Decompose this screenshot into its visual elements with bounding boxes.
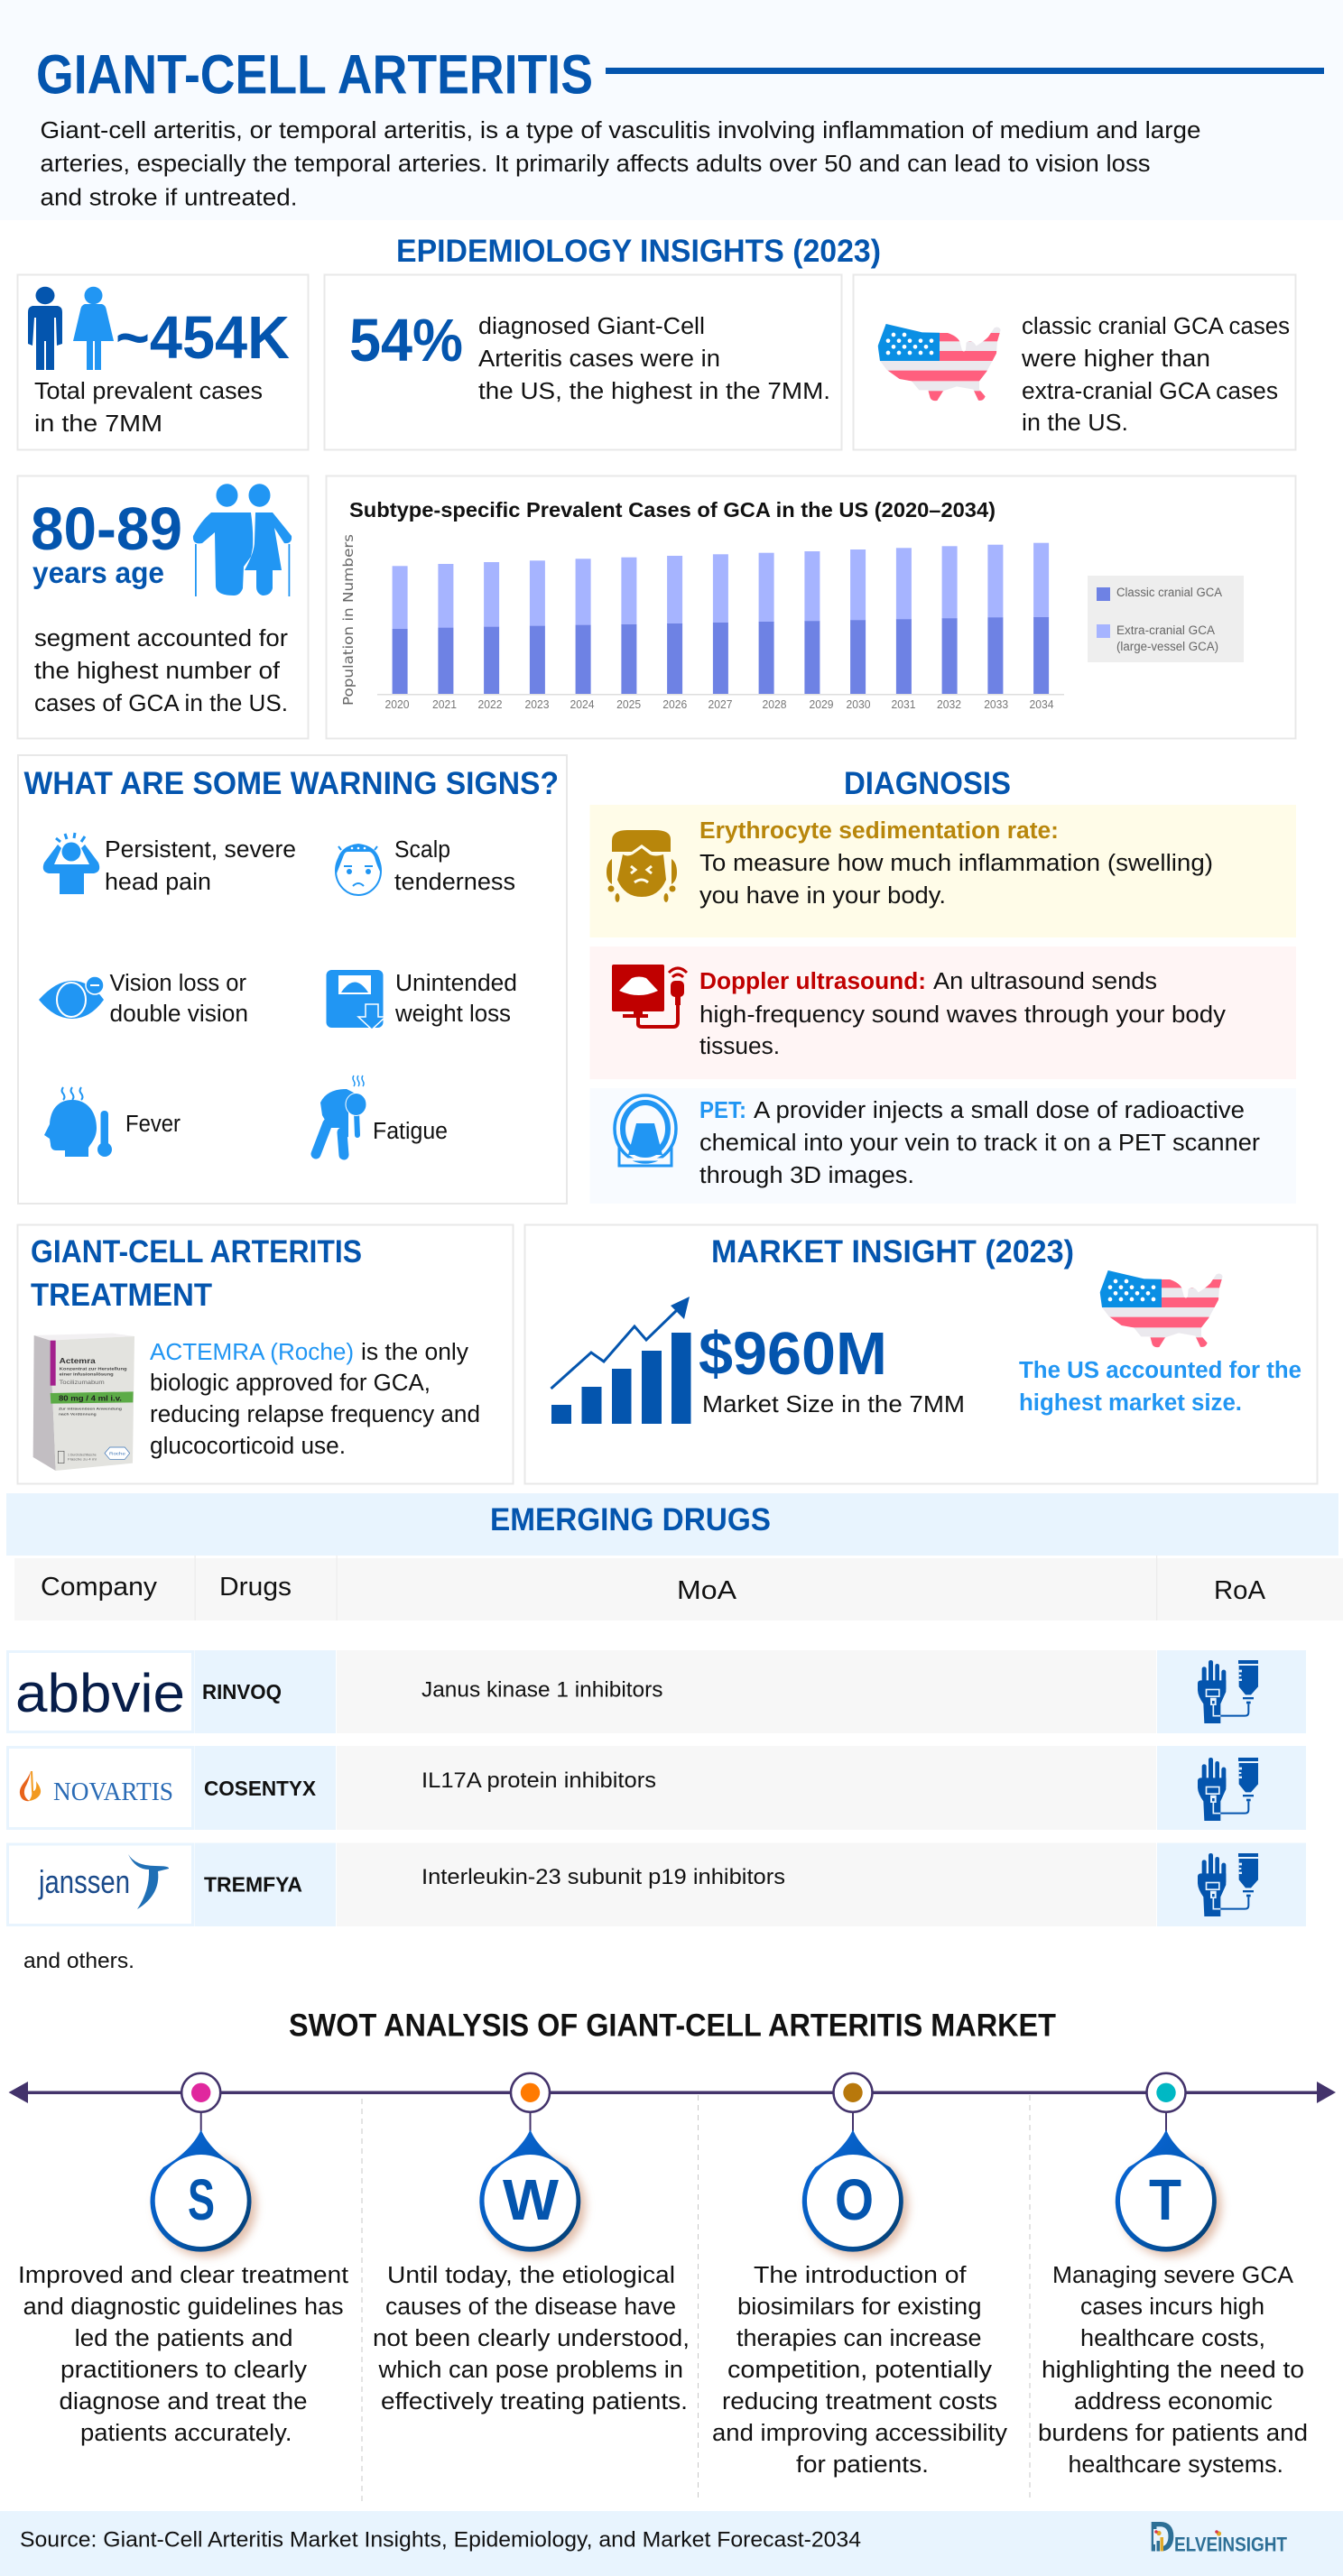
heading: GIANT-CELL ARTERITIS [31, 1234, 362, 1270]
sign: fatigue: Fatigue [373, 1119, 448, 1144]
MoA: Interleukin-23 subunit p19 inhibitors [421, 1865, 785, 1889]
text: To measure how much inflammation (swelling) [699, 851, 1213, 876]
description: glucocorticoid use. [150, 1434, 346, 1459]
sign: fever: Fever [125, 1112, 181, 1137]
sign: scalp tenderness [336, 837, 515, 895]
text: Doppler ultrasound: [699, 969, 926, 994]
product box: Actemra: Tocilizumabum [60, 1380, 105, 1386]
sign: scalp tenderness: Scalp [394, 837, 450, 863]
legend: Classic cranial GCA [1116, 586, 1222, 599]
icon: ultrasound machine [612, 965, 687, 1027]
year labels: 2029 [809, 698, 834, 711]
sign: weight loss: Unintended [395, 971, 517, 996]
SWOT: weakness: effectively treating patients. [381, 2389, 688, 2414]
description: cases of GCA in the US. [34, 691, 288, 716]
description [34, 626, 289, 716]
product box: Actemra: Konzentrat zur Herstellung [60, 1366, 127, 1371]
heading: diagnosis: DIAGNOSIS [844, 766, 1011, 801]
header panel [0, 0, 1343, 220]
description [1021, 314, 1290, 436]
product box: Actemra: Roche [109, 1452, 125, 1457]
intro paragraph [40, 118, 1200, 211]
description: were higher than [1021, 346, 1210, 372]
text: through 3D images. [699, 1163, 914, 1188]
intro paragraph: and stroke if untreated. [40, 186, 298, 211]
year labels: 2032 [937, 698, 961, 711]
heading: SWOT: SWOT ANALYSIS OF GIANT-CELL ARTERITIS MARKET [289, 2008, 1056, 2043]
stat: 960M: $960M [699, 1320, 887, 1388]
description: extra-cranial GCA cases [1022, 379, 1278, 404]
description: ACTEMRA (Roche) [150, 1340, 354, 1365]
SWOT: weakness: causes of the disease have [385, 2294, 676, 2320]
panel: erythrocyte sedimentation rate [590, 805, 1296, 937]
year labels: 2034 [1029, 698, 1054, 711]
year labels: 2033 [984, 698, 1008, 711]
icon: fever head [44, 1087, 112, 1157]
description: reducing relapse frequency and [150, 1402, 480, 1427]
description: in the US. [1022, 411, 1128, 436]
SWOT: weakness: W [503, 2167, 560, 2232]
heading: TREATMENT [31, 1278, 212, 1313]
SWOT: weakness: not been clearly understood, [373, 2326, 690, 2351]
product box: Actemra: einer Infusionslösung [60, 1371, 114, 1376]
product box: Actemra: Actemra [60, 1356, 96, 1365]
SWOT: strength: diagnose and treat the [60, 2389, 307, 2414]
y-axis label: Population in Numbers [340, 534, 357, 706]
panel: total prevalent cases [18, 274, 309, 449]
description: biologic approved for GCA, [150, 1371, 431, 1396]
product box: Actemra: nach Verdünnung [59, 1411, 97, 1416]
text: PET: [699, 1098, 746, 1123]
table header: Drugs [219, 1573, 292, 1602]
year labels: 2020 [384, 698, 410, 711]
product box: Actemra: 1 Durchstechflasche [68, 1453, 97, 1456]
year labels: 2031 [892, 698, 916, 711]
stat: 454K: ~454K [116, 304, 290, 372]
logo: novartis: NOVARTIS [53, 1777, 173, 1806]
SWOT: strength: and diagnostic guidelines has [23, 2294, 344, 2320]
icon: elderly couple [193, 484, 292, 596]
MoA: IL17A protein inhibitors [421, 1768, 656, 1793]
sign: vision loss [39, 971, 248, 1027]
panel: doppler ultrasound [590, 946, 1296, 1079]
icon: scale [327, 970, 385, 1029]
text [699, 818, 1213, 909]
description: segment accounted for [34, 626, 289, 651]
sign: fever [44, 1087, 181, 1157]
panel: treatment [18, 1225, 513, 1483]
sign: vision loss: double vision [110, 1002, 248, 1027]
footer [0, 2511, 1343, 2576]
years age: years age [32, 556, 164, 589]
SWOT: strength: patients accurately. [80, 2421, 292, 2446]
SWOT: strength [18, 2129, 348, 2446]
sign: fatigue [316, 1076, 448, 1155]
SWOT: strength: Improved and clear treatment [18, 2263, 348, 2288]
stat: 54%: 54% [349, 307, 463, 374]
callout: The US accounted for the [1019, 1358, 1301, 1383]
stat: 80-89: 80-89 [31, 495, 182, 563]
panel: market insight [525, 1225, 1318, 1483]
SWOT: opportunity: biosimilars for existing [737, 2294, 982, 2320]
logo: novartis [20, 1771, 173, 1806]
drug name: COSENTYX [204, 1777, 317, 1800]
icon: head pain [43, 833, 99, 894]
intro paragraph: arteries, especially the temporal arteries. It primarily affects adults over 50 and can lead to vision loss [40, 152, 1151, 177]
title: GIANT-CELL ARTERITIS [36, 43, 593, 105]
icon: PET scanner [615, 1095, 676, 1166]
panel: classic cranial cases [854, 274, 1296, 449]
table row: RINVOQ [7, 1650, 1306, 1733]
note: and others: and others. [23, 1949, 134, 1973]
icon: growth chart [551, 1333, 691, 1424]
banner: emerging drugs: EMERGING DRUGS [490, 1502, 771, 1537]
drug name: RINVOQ [202, 1680, 282, 1703]
SWOT: weakness [373, 2129, 690, 2414]
logo: DelveInsight [1149, 2512, 1287, 2561]
drug name: TREMFYA [204, 1873, 302, 1897]
icon: sad face [607, 830, 677, 902]
SWOT: threat: T [1149, 2167, 1181, 2232]
year labels: 2023 [525, 698, 550, 711]
SWOT: opportunity: reducing treatment costs [722, 2389, 997, 2414]
icon: eye [39, 976, 104, 1019]
description: diagnosed Giant-Cell [478, 314, 705, 339]
SWOT: opportunity: competition, potentially [727, 2358, 992, 2383]
description [150, 1340, 480, 1459]
text: you have in your body. [699, 883, 946, 909]
callout [1019, 1358, 1301, 1416]
year labels: 2028 [762, 698, 787, 711]
year labels: 2021 [432, 698, 457, 711]
source: Source: Giant-Cell Arteritis Market Insights, Epidemiology, and Market Forecast-2034 [20, 2528, 861, 2552]
product box: Actemra [33, 1334, 134, 1471]
SWOT: opportunity: therapies can increase [736, 2326, 982, 2351]
product box: Actemra: Zur intravenösen Anwendung [59, 1407, 123, 1411]
product box: Actemra: 80 mg / 4 ml i.v. [59, 1393, 122, 1402]
description [478, 314, 830, 404]
SWOT: strength: S [188, 2167, 215, 2232]
label [34, 379, 263, 437]
product box: Actemra: Flasche zu 4 ml [68, 1457, 97, 1461]
SWOT: weakness: Until today, the etiological [387, 2263, 675, 2288]
year labels: 2022 [478, 698, 503, 711]
description: classic cranial GCA cases [1022, 314, 1290, 339]
SWOT: opportunity: The introduction of [754, 2263, 968, 2288]
text [699, 1098, 1261, 1188]
SWOT: threat: highlighting the need to [1042, 2358, 1304, 2383]
year labels [384, 698, 1054, 711]
heading [31, 1234, 362, 1313]
icon: scalp face [336, 844, 381, 895]
year labels: 2024 [570, 698, 595, 711]
icon: fatigued person [316, 1076, 366, 1155]
heading: MARKET INSIGHT (2023) [711, 1234, 1074, 1270]
sign: head pain: head pain [105, 870, 211, 895]
legend [1088, 576, 1244, 662]
description: the highest number of [34, 659, 281, 684]
icon: IV infusion [1198, 1660, 1258, 1723]
banner: emerging drugs [6, 1493, 1338, 1556]
text: A provider injects a small dose of radioactive [754, 1098, 1245, 1123]
SWOT: threat: burdens for patients and [1038, 2421, 1308, 2446]
panel: age segment [18, 476, 309, 738]
year labels: 2027 [708, 698, 733, 711]
table row: TREMFYA [7, 1842, 1306, 1926]
panel: subtype chart [327, 476, 1296, 738]
SWOT: opportunity: O [835, 2167, 874, 2232]
logo: DelveInsight: ELVEINSIGHT [1174, 2534, 1287, 2555]
SWOT: threat: healthcare systems. [1069, 2452, 1283, 2478]
description: Arteritis cases were in [478, 346, 720, 372]
icon: US flag map [875, 320, 1005, 404]
icon: man and woman [28, 287, 114, 370]
chart title: Subtype-specific Prevalent Cases of GCA in the US (2020–2034) [349, 498, 996, 522]
text [699, 969, 1226, 1059]
logo: janssen: janssen [38, 1863, 130, 1900]
sign: vision loss: Vision loss or [110, 971, 247, 996]
SWOT: threat: cases incurs high [1080, 2294, 1264, 2320]
text: Erythrocyte sedimentation rate: [699, 818, 1059, 844]
SWOT: threat: address economic [1074, 2389, 1273, 2414]
heading: WHAT ARE SOME WARNING SIGNS? [23, 766, 559, 801]
year labels: 2030 [847, 698, 871, 711]
table header: Company [41, 1573, 158, 1602]
panel: 54 percent [325, 274, 841, 449]
icon: IV infusion [1198, 1758, 1258, 1821]
text: chemical into your vein to track it on a PET scanner [699, 1131, 1261, 1156]
year labels: 2025 [616, 698, 641, 711]
logo: abbvie: abbvie [15, 1663, 185, 1723]
SWOT: weakness: which can pose problems in [377, 2358, 683, 2383]
label: in the 7MM [34, 411, 162, 437]
callout: highest market size. [1019, 1390, 1242, 1416]
title rule [606, 68, 1324, 74]
sign: scalp tenderness: tenderness [394, 870, 515, 895]
sign: weight loss [327, 970, 517, 1029]
legend: (large-vessel GCA) [1116, 640, 1218, 653]
icon: growth arrow [551, 1297, 690, 1389]
icon: US flag map [1098, 1267, 1227, 1351]
text: high-frequency sound waves through your body [699, 1002, 1226, 1028]
SWOT timeline [9, 2073, 1336, 2504]
SWOT: strength: led the patients and [75, 2326, 293, 2351]
sign: weight loss: weight loss [394, 1002, 511, 1027]
description: the US, the highest in the 7MM. [478, 379, 830, 404]
SWOT: threat: healthcare costs, [1080, 2326, 1265, 2351]
panel: warning signs [18, 755, 567, 1204]
logo: DelveInsight: D [1149, 2512, 1175, 2561]
intro paragraph: Giant-cell arteritis, or temporal arteritis, is a type of vasculitis involving inflammation of medium and large [40, 118, 1200, 143]
sign: head pain: Persistent, severe [105, 837, 296, 863]
sign: head pain [43, 833, 296, 895]
description: is the only [361, 1340, 468, 1365]
text: tissues. [699, 1034, 780, 1059]
heading: epidemiology insights: EPIDEMIOLOGY INSIGHTS (2023) [396, 234, 881, 269]
text: An ultrasound sends [933, 969, 1157, 994]
SWOT: opportunity: for patients. [796, 2452, 929, 2478]
icon: IV infusion [1198, 1853, 1258, 1916]
panel: PET [590, 1088, 1296, 1204]
label: Market Size in the 7MM [702, 1392, 965, 1417]
table header: MoA [677, 1576, 737, 1605]
SWOT: opportunity [712, 2129, 1007, 2478]
legend: Extra-cranial GCA [1116, 623, 1215, 637]
MoA: Janus kinase 1 inhibitors [421, 1678, 662, 1702]
logo: janssen [38, 1854, 169, 1909]
table header: RoA [1214, 1576, 1266, 1605]
bar chart [377, 543, 1064, 711]
table row: COSENTYX [7, 1746, 1306, 1830]
label: Total prevalent cases [34, 379, 263, 404]
SWOT: threat [1038, 2129, 1308, 2478]
year labels: 2026 [662, 698, 687, 711]
table header [14, 1556, 1343, 1620]
SWOT: opportunity: and improving accessibility [712, 2421, 1007, 2446]
SWOT: strength: practitioners to clearly [60, 2358, 307, 2383]
SWOT: threat: Managing severe GCA [1052, 2263, 1293, 2288]
